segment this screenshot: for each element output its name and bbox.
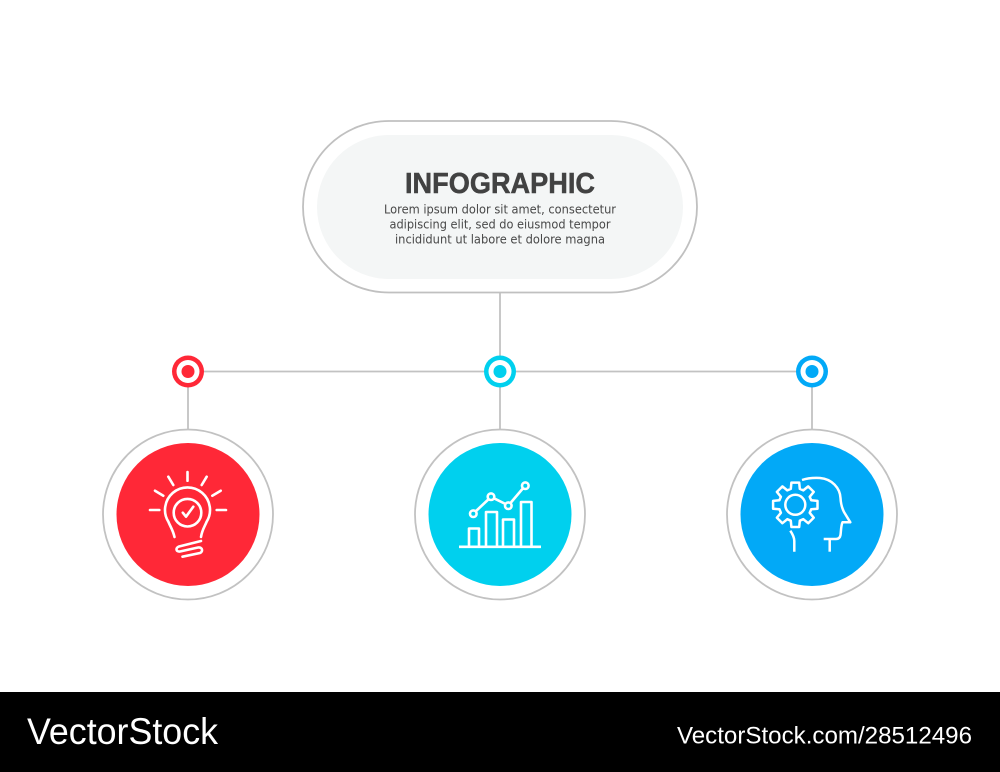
icon: bar chart with trend line	[459, 482, 541, 547]
icon: light bulb with check mark	[150, 472, 226, 557]
heading: INFOGRAPHIC	[405, 168, 595, 200]
text block: description: adipiscing elit, sed do eiusmod tempor	[390, 216, 611, 232]
panel: header pill	[303, 121, 697, 292]
text block: description: incididunt ut labore et dolore magna	[395, 231, 605, 246]
panel: blue circle with head and gear	[727, 430, 897, 600]
footer bar	[0, 692, 1000, 772]
connector node: cyan	[484, 356, 516, 388]
text block: description	[384, 202, 617, 246]
connector node: red	[172, 356, 204, 388]
panel: cyan circle with chart	[415, 430, 585, 600]
panel: red circle with light bulb	[103, 430, 273, 600]
text block: description: Lorem ipsum dolor sit amet, consectetur	[384, 202, 617, 216]
footer image id: VectorStock.com/28512496	[677, 722, 972, 750]
icon: head with gear	[773, 478, 850, 552]
footer logo text: VectorStock	[27, 711, 218, 752]
connector node: blue	[796, 356, 828, 388]
